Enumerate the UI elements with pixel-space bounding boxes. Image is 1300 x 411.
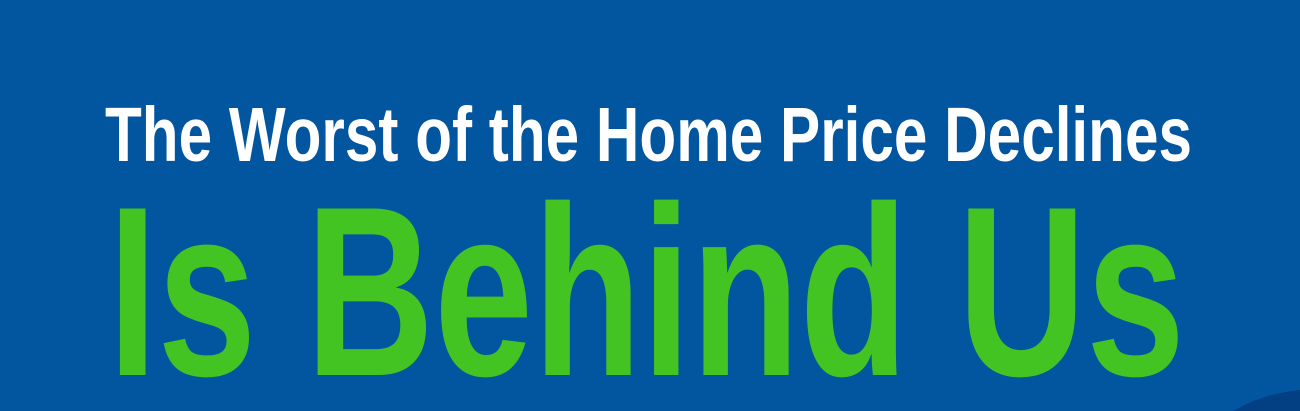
decorative corner shape	[1233, 390, 1300, 411]
